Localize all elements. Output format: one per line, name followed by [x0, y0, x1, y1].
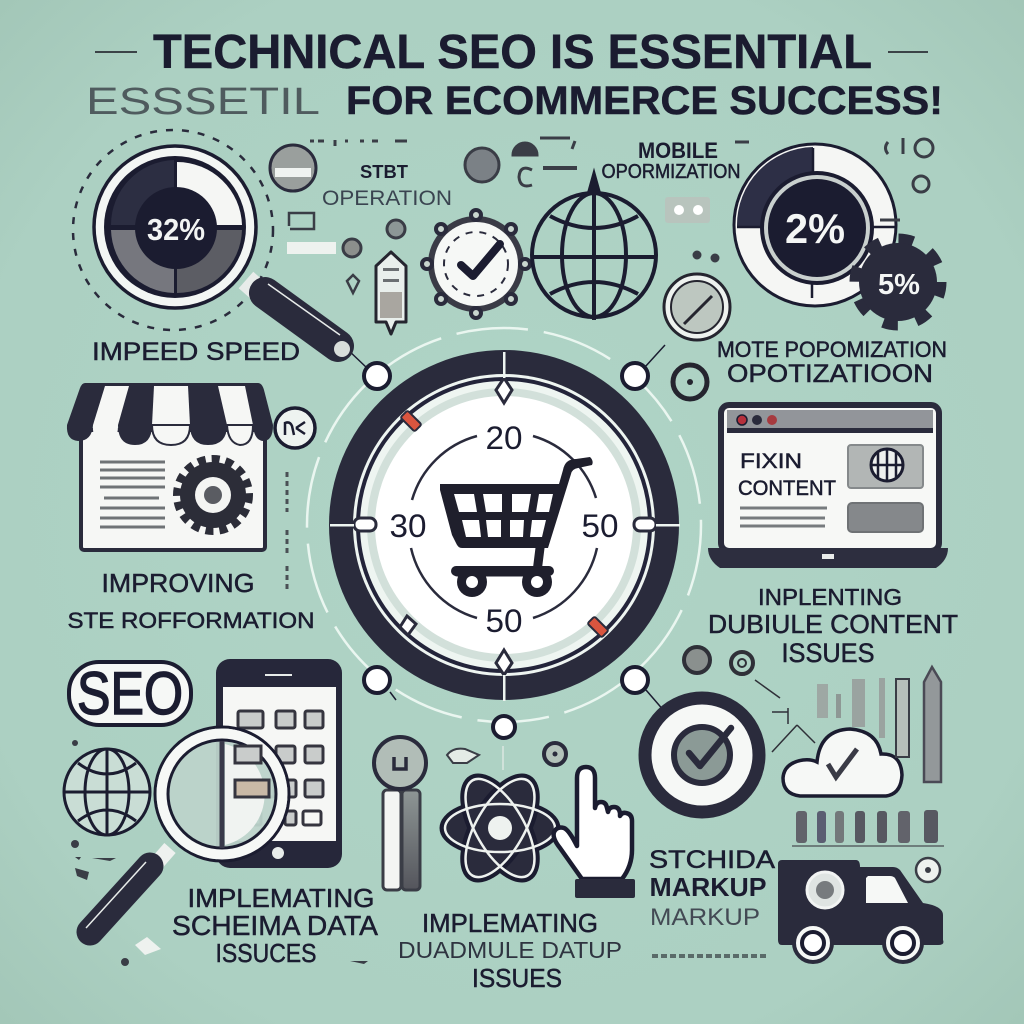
icon: tube marker — [376, 252, 406, 334]
icon: small dial — [664, 274, 730, 340]
label: mote optimization: OPOTIZATIOON — [727, 360, 933, 388]
label: implementing duplicate data issues: IMPLEMATING — [422, 908, 598, 938]
icon: small ring — [673, 365, 707, 399]
label: implementing duplicate data issues — [398, 908, 622, 993]
dial arcs — [411, 436, 597, 618]
label: impeed speed: IMPEED SPEED — [92, 338, 300, 366]
label: schema markup — [649, 846, 775, 931]
label: implementing duplicate data issues: ISSUES — [472, 963, 562, 993]
label: site operation — [322, 162, 452, 210]
label: mote optimization: MOTE POPOMIZATION — [717, 337, 947, 362]
central cart dial: 30 — [390, 508, 426, 544]
icon: magnifier with 32% gauge: 32% — [147, 212, 205, 247]
dial numbers: 20 — [486, 420, 522, 456]
icon: magnifier over phone — [86, 727, 289, 932]
title: TECHNICAL SEO IS ESSENTIAL — [153, 26, 872, 79]
label: mobile optimization: OPORMIZATION — [602, 161, 740, 183]
faint smudged text — [652, 954, 768, 958]
label: schema markup: MARKUP — [650, 904, 760, 931]
red markers — [400, 410, 422, 432]
dashed connector ring — [307, 328, 701, 722]
icon: small clusters lower right — [684, 647, 815, 752]
icon: donut gauge 2%: 2% — [785, 205, 845, 252]
label: implementing schema data issues — [172, 883, 378, 968]
icon: check badge — [645, 698, 759, 812]
icon: gear 5%: 5% — [878, 269, 920, 301]
connector nodes — [346, 345, 665, 738]
icon: delivery truck — [778, 860, 943, 962]
icon: smartphone — [216, 659, 342, 868]
label: implementing schema data issues: SCHEIMA DATA — [172, 910, 378, 941]
icon: laptop with content — [708, 405, 948, 568]
label: implementing duplicate content issues — [708, 584, 958, 668]
small rect glyph — [665, 197, 710, 223]
icon: SEO badge: SEO — [77, 660, 183, 727]
central cart dial: 50 — [582, 508, 618, 544]
icon: atom — [442, 764, 558, 892]
label: implementing duplicate content issues: DUBIULE CONTENT — [708, 609, 958, 639]
label: implementing duplicate content issues: INPLENTING — [758, 584, 902, 610]
label: implementing schema data issues: IMPLEMATING — [188, 883, 374, 913]
dial ticks — [354, 378, 656, 675]
vertical faint marks — [286, 472, 288, 592]
label: improving site reformation — [68, 568, 314, 633]
small items above atom — [447, 743, 566, 770]
icon: globe small — [64, 749, 150, 835]
label: improving site reformation: STE ROFFORMATION — [68, 608, 314, 633]
label: implementing duplicate data issues: DUADMULE DATUP — [398, 937, 622, 963]
icon: gear 5% — [855, 239, 941, 325]
label: implementing duplicate content issues: ISSUES — [782, 638, 874, 668]
title: ESSSETIL — [86, 81, 320, 123]
label: site operation: OPERATION — [322, 187, 452, 210]
small round token — [916, 858, 940, 882]
label: mobile optimization — [602, 138, 740, 183]
title: FOR ECOMMERCE SUCCESS! — [346, 79, 943, 123]
icon: donut gauge 2% — [734, 144, 896, 306]
label: schema markup: STCHIDA — [649, 846, 775, 874]
icon: half-gray round icon — [270, 145, 316, 191]
white bar — [287, 242, 336, 254]
label: mobile optimization: MOBILE — [638, 138, 718, 163]
icon: storefront — [67, 383, 273, 550]
title — [86, 26, 943, 123]
bar chart — [792, 667, 944, 846]
scattered small icons top centre — [289, 138, 718, 293]
label: schema markup: MARKUP — [650, 872, 766, 902]
icon: shopping cart — [440, 457, 593, 597]
icon: magnifier with 32% gauge — [73, 130, 350, 357]
icon: pointing hand — [554, 767, 635, 898]
label: mote optimization — [717, 337, 947, 388]
icon: laptop with content: CONTENT — [738, 477, 836, 500]
icon: globe — [532, 175, 656, 320]
small blots lower left — [71, 740, 368, 966]
icon: cloud with check — [783, 729, 902, 796]
white speck lower left — [135, 937, 161, 955]
small dots top right — [735, 138, 933, 220]
central cart dial: 50 — [486, 603, 522, 639]
icon: badge with check — [422, 210, 530, 318]
label: improving site reformation: IMPROVING — [102, 568, 254, 598]
label: site operation: STBT — [360, 162, 408, 182]
central cart dial — [329, 350, 680, 701]
icon: small badge — [275, 408, 315, 448]
label: implementing schema data issues: ISSUCES — [216, 938, 316, 968]
icon: laptop with content: FIXIN — [740, 450, 802, 473]
icon: key tool — [374, 737, 426, 890]
